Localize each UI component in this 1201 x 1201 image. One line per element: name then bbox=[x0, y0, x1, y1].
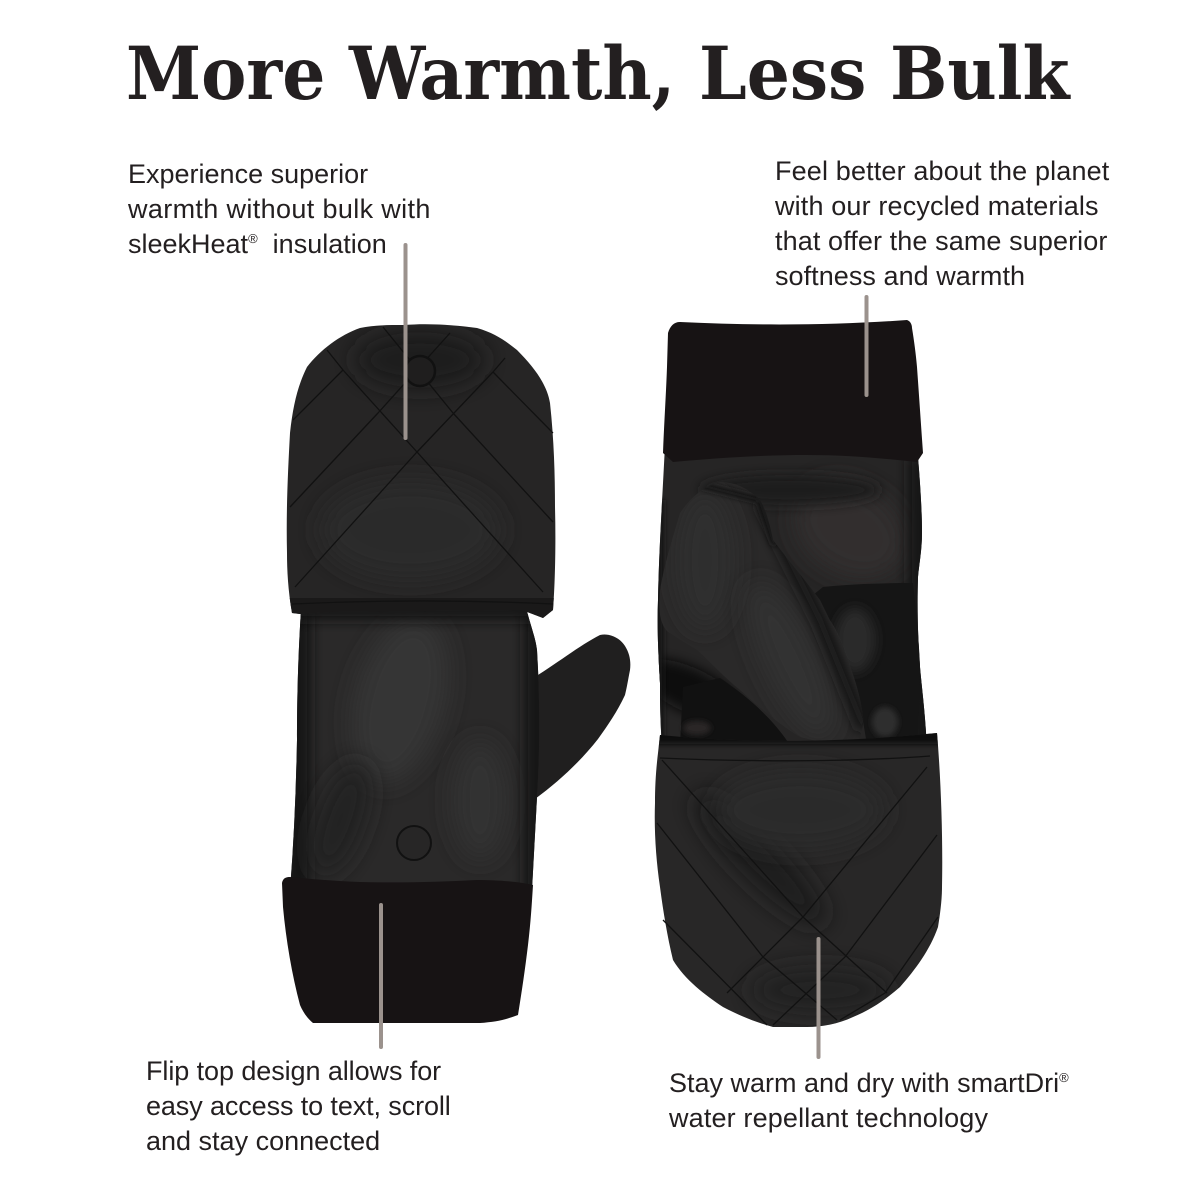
text: recycled materials: that offer the same superior bbox=[775, 226, 1107, 256]
text: flip top design: Flip top design allows for bbox=[146, 1056, 441, 1086]
callout line: smartDri bbox=[816, 937, 820, 1059]
text: recycled materials: softness and warmth bbox=[775, 261, 1025, 291]
flip top bbox=[655, 733, 942, 1027]
leather patch: right bbox=[803, 583, 920, 745]
text: sleekHeat insulation bbox=[128, 159, 431, 259]
text: smartDri: Stay warm and dry with smartDri® bbox=[669, 1068, 1069, 1098]
snap: hand bbox=[397, 826, 431, 860]
leather patch: left bbox=[680, 678, 790, 745]
text: smartDri bbox=[669, 1068, 1069, 1133]
text: recycled materials: with our recycled materials bbox=[775, 191, 1099, 221]
right mitten bbox=[631, 320, 945, 1027]
text: flip top design: easy access to text, scroll bbox=[146, 1091, 451, 1121]
text: flip top design bbox=[146, 1056, 451, 1156]
callout line: flip top bbox=[379, 903, 383, 1049]
text: sleekHeat insulation: sleekHeat® insulation bbox=[128, 229, 387, 259]
callout line: recycled bbox=[864, 295, 868, 397]
hand body bbox=[290, 610, 539, 885]
quilting bbox=[290, 327, 553, 604]
cuff bbox=[282, 877, 533, 1023]
cuff bbox=[663, 320, 923, 462]
text: smartDri: water repellant technology bbox=[669, 1103, 988, 1133]
text: sleekHeat insulation: Experience superior bbox=[128, 159, 368, 189]
snap: flip top bbox=[405, 356, 435, 386]
left mitten bbox=[280, 324, 630, 1023]
flip top bbox=[287, 324, 555, 618]
thumb bbox=[530, 635, 630, 799]
illustration: gloves bbox=[282, 243, 942, 1059]
quilting bbox=[657, 756, 938, 1025]
text: flip top design: and stay connected bbox=[146, 1126, 380, 1156]
title: More Warmth, Less Bulk bbox=[126, 31, 1070, 117]
text: recycled materials: Feel better about the planet bbox=[775, 156, 1109, 186]
hand body bbox=[658, 454, 926, 741]
callout line: sleekHeat bbox=[404, 243, 408, 440]
text: sleekHeat insulation: warmth without bulk with bbox=[128, 194, 431, 224]
thumb bbox=[659, 482, 863, 750]
text: recycled materials bbox=[775, 156, 1110, 291]
